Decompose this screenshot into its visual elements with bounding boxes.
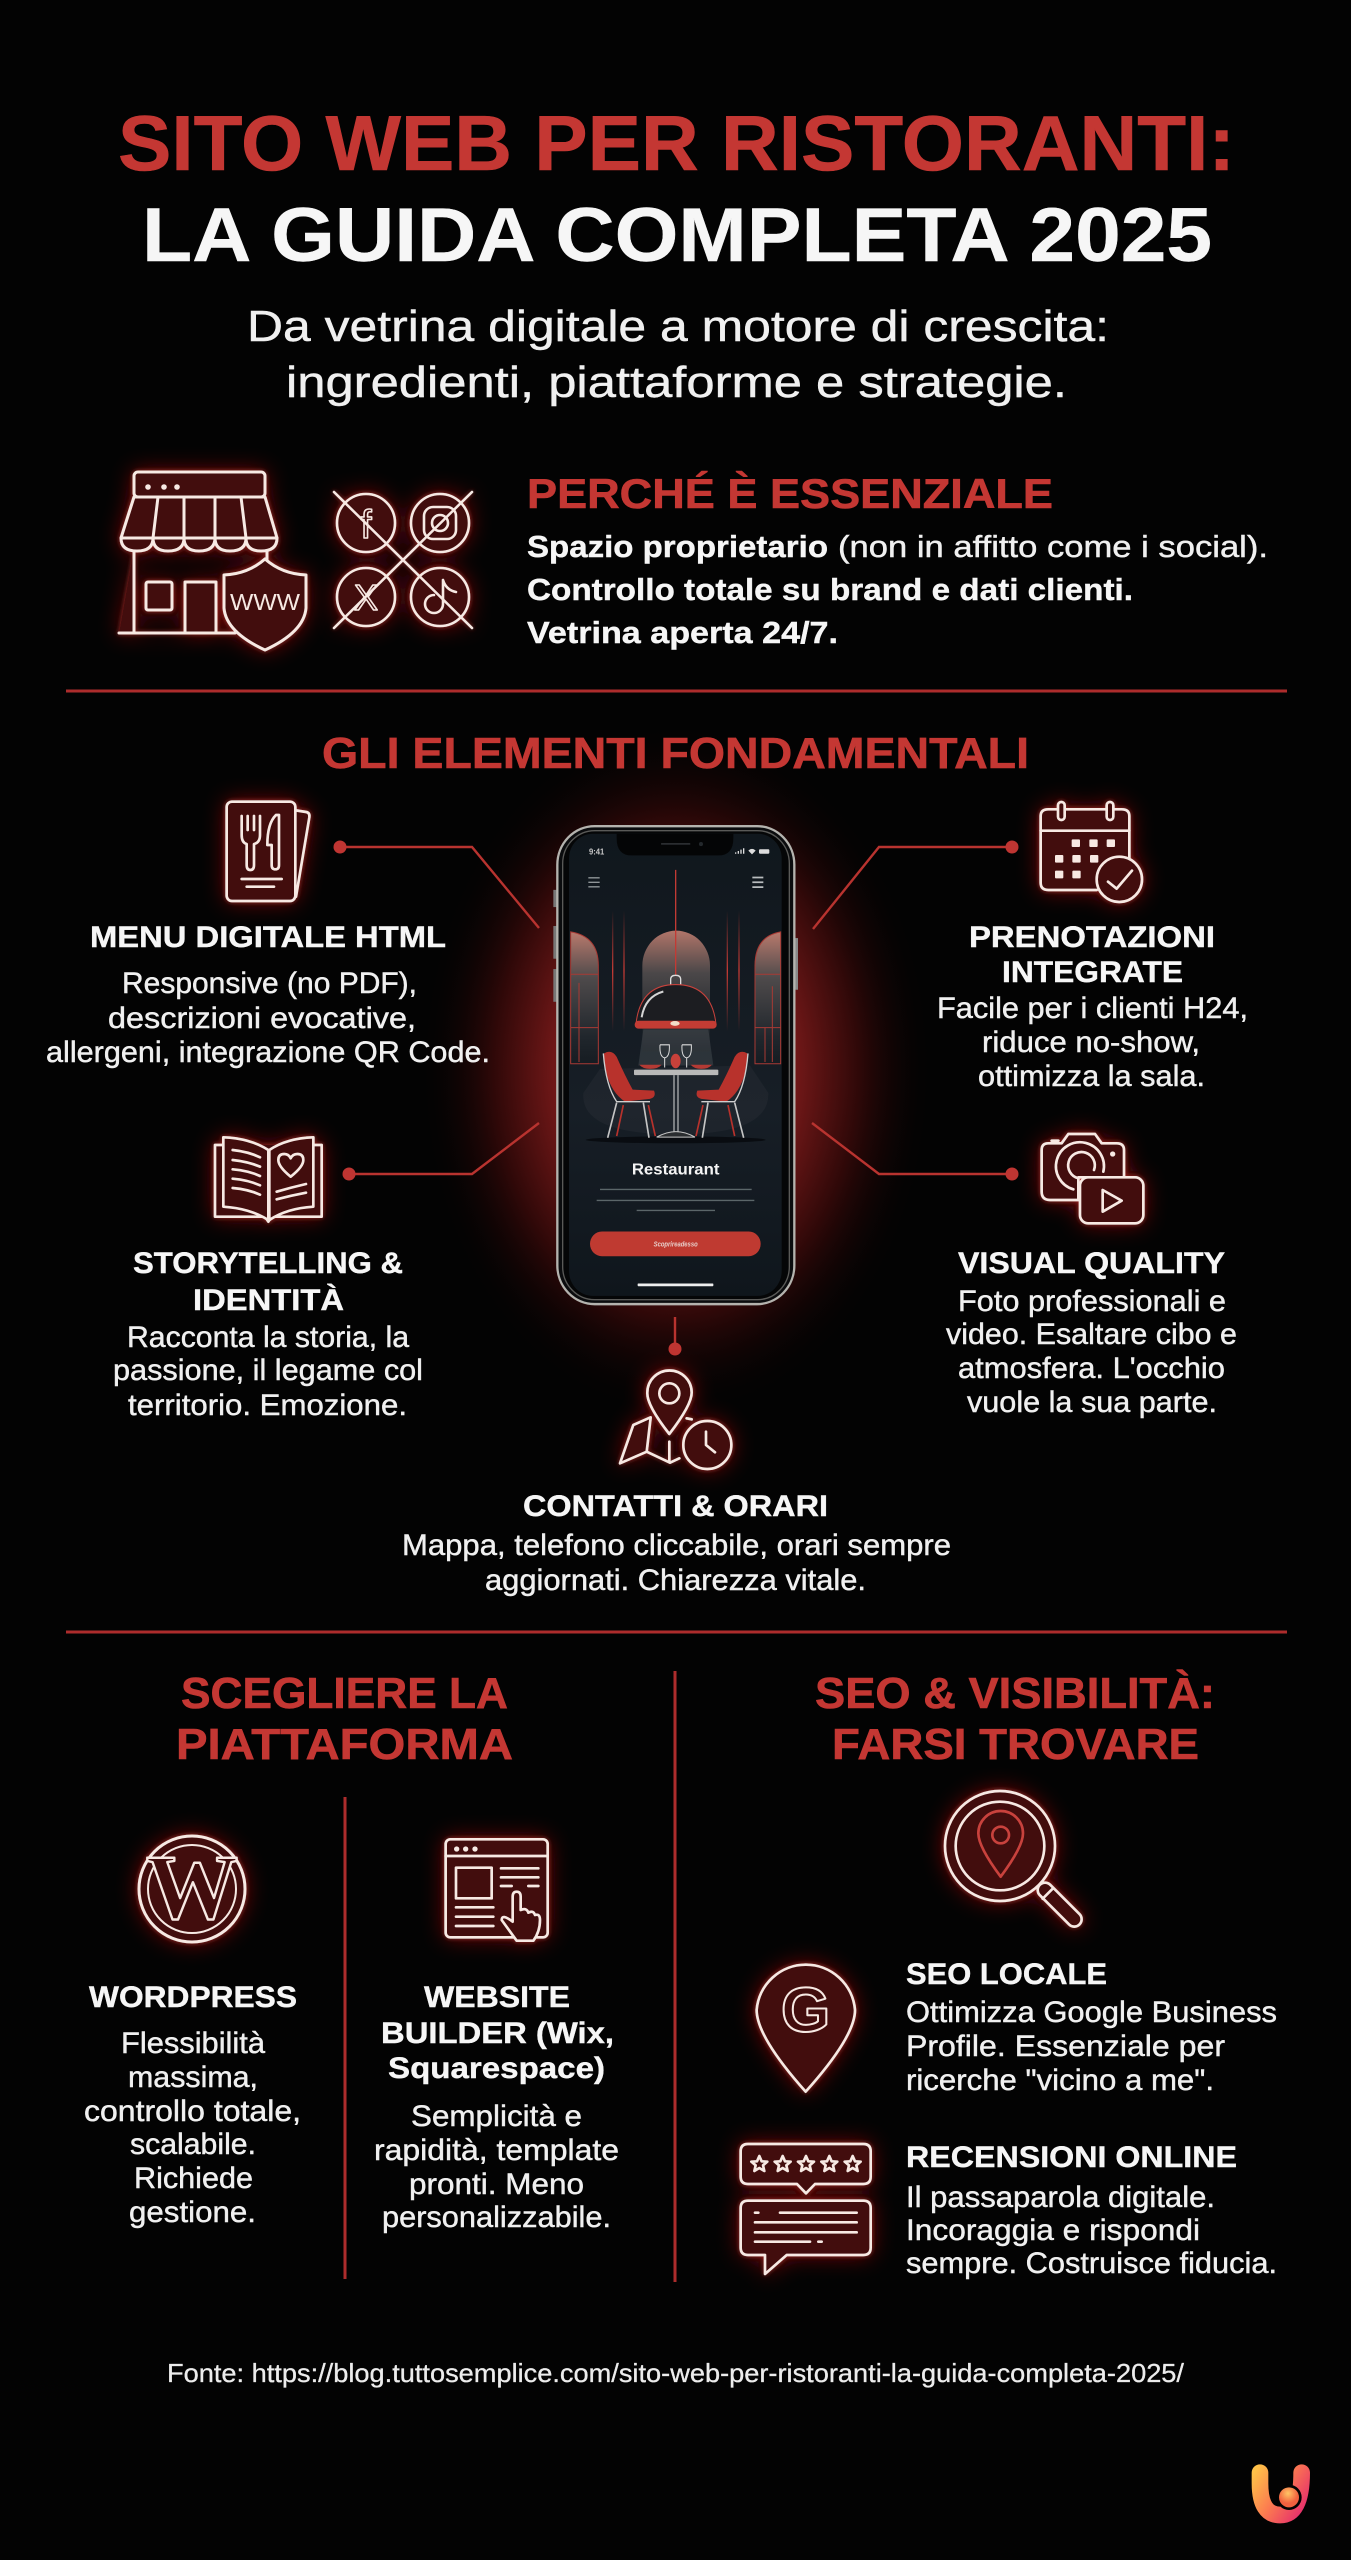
text: website builder heading: WEBSITE	[424, 1981, 570, 2014]
text: perché è essenziale: Vetrina aperta 24/7.	[527, 615, 838, 650]
icon: website builder	[446, 1839, 548, 1941]
text: prenotazioni heading: PRENOTAZIONI	[969, 921, 1215, 954]
text: storytelling description: Racconta la storia, la	[127, 1321, 409, 1354]
restaurant illustration	[571, 870, 781, 1143]
chairs	[603, 1052, 748, 1138]
icon: map pin and clock	[620, 1370, 731, 1469]
subtitle	[247, 302, 1109, 407]
text: website builder description: pronti. Meno	[409, 2168, 584, 2201]
text: visual quality description: vuole la sua parte.	[967, 1386, 1217, 1419]
text: website builder description: rapidità, template	[374, 2134, 619, 2167]
text: visual quality heading: VISUAL QUALITY	[958, 1247, 1225, 1280]
phone mockup	[553, 826, 798, 1304]
text: website builder heading: BUILDER (Wix,	[381, 2017, 614, 2050]
text: menu description	[46, 967, 490, 1069]
text: prenotazioni heading: INTEGRATE	[1002, 956, 1183, 989]
element: menu digitale	[46, 802, 490, 1069]
text: website builder heading	[381, 1981, 614, 2085]
text: visual quality description: Foto professionali e	[958, 1285, 1226, 1318]
text: wordpress description: Richiede	[134, 2162, 253, 2195]
text: wordpress description: scalabile.	[130, 2128, 256, 2161]
text: seo locale description: Ottimizza Google Business	[906, 1996, 1277, 2029]
text: seo locale description: ricerche "vicino a me".	[906, 2064, 1214, 2097]
text: visual quality description	[946, 1285, 1237, 1419]
hamburger menus	[588, 877, 763, 887]
icon: crossed-out social networks	[334, 492, 472, 628]
text: storytelling description: territorio. Emozione.	[128, 1389, 407, 1422]
source line: Fonte: https://blog.tuttosemplice.com/sito-web-per-ristoranti-la-guida-completa-2025/	[167, 2358, 1185, 2388]
text: seo locale heading: SEO LOCALE	[906, 1958, 1107, 1991]
text: prenotazioni description: ottimizza la sala.	[978, 1060, 1205, 1093]
title	[118, 99, 1235, 278]
text: recensioni description	[906, 2181, 1277, 2280]
text: contatti description: aggiornati. Chiarezza vitale.	[485, 1564, 866, 1597]
text: seo locale description: Profile. Essenziale per	[906, 2030, 1225, 2063]
text: wordpress description: controllo totale,	[84, 2095, 301, 2128]
element: prenotazioni	[937, 802, 1248, 1093]
text: storytelling heading: IDENTITÀ	[193, 1283, 344, 1317]
text: recensioni description: Il passaparola digitale.	[906, 2181, 1215, 2214]
text: seo locale description	[906, 1996, 1277, 2097]
text: wordpress heading: WORDPRESS	[89, 1981, 297, 2014]
heading: gli elementi fondamentali: GLI ELEMENTI FONDAMENTALI	[322, 729, 1029, 778]
text: contatti description	[402, 1529, 951, 1597]
text: prenotazioni description: Facile per i clienti H24,	[937, 992, 1248, 1025]
text: website builder heading: Squarespace)	[388, 2052, 605, 2085]
text: visual quality description: video. Esaltare cibo e	[946, 1318, 1237, 1351]
icon: menu card	[227, 802, 309, 901]
status bar: 9:41	[589, 847, 605, 856]
title: SITO WEB PER RISTORANTI:	[118, 99, 1235, 187]
text: perché è essenziale	[527, 529, 1268, 650]
element: contatti	[402, 1370, 951, 1597]
text: perché è essenziale: (non in affitto come i social).	[838, 529, 1268, 564]
panel: scegliere la piattaforma	[84, 1669, 619, 2234]
panel: perché è essenziale	[119, 470, 1268, 650]
icon: crossed-out social networks: X	[354, 577, 378, 618]
text: website builder description: Semplicità e	[411, 2100, 582, 2133]
text: wordpress description: massima,	[128, 2061, 258, 2094]
text: storytelling description	[113, 1321, 423, 1422]
element: visual quality	[946, 1134, 1237, 1419]
heading: seo e visibilità: FARSI TROVARE	[832, 1720, 1199, 1769]
text: storytelling heading	[133, 1247, 403, 1317]
text: recensioni description: sempre. Costruisce fiducia.	[906, 2247, 1277, 2280]
status bar	[589, 842, 769, 856]
text: contatti description: Mappa, telefono cliccabile, orari sempre	[402, 1529, 951, 1562]
text: wordpress description: Flessibilità	[121, 2027, 265, 2060]
phone glow	[421, 725, 931, 1415]
element: storytelling	[113, 1137, 423, 1422]
text: website builder description	[374, 2100, 619, 2234]
heading: seo e visibilità: SEO & VISIBILITÀ:	[815, 1668, 1215, 1718]
text: prenotazioni heading	[969, 921, 1215, 989]
text: contatti heading: CONTATTI & ORARI	[523, 1490, 828, 1523]
title: LA GUIDA COMPLETA 2025	[142, 193, 1212, 278]
connector lines	[334, 840, 1018, 1356]
text: recensioni description: Incoraggia e rispondi	[906, 2214, 1200, 2247]
phone screen title: Restaurant	[632, 1161, 719, 1179]
icon: calendar with check	[1041, 802, 1142, 902]
icon: wordpress: W	[146, 1836, 238, 1938]
phone button: Scoprireadesso	[654, 1241, 698, 1248]
text: recensioni heading: RECENSIONI ONLINE	[906, 2141, 1237, 2174]
icon: crossed-out social networks: f	[360, 503, 372, 547]
heading: perché è essenziale: PERCHÉ È ESSENZIALE	[527, 470, 1053, 517]
text: website builder description: personalizzabile.	[382, 2201, 611, 2234]
heading: seo e visibilità	[815, 1668, 1215, 1769]
icon: google pin: G	[781, 1976, 830, 2046]
icon: open book with heart	[215, 1137, 322, 1222]
text: wordpress description: gestione.	[129, 2196, 256, 2229]
text: perché è essenziale: Controllo totale su brand e dati clienti.	[527, 572, 1133, 607]
text: menu description: allergeni, integrazione QR Code.	[46, 1036, 490, 1069]
text: menu description: Responsive (no PDF),	[122, 967, 417, 1000]
subtitle: ingredienti, piattaforme e strategie.	[286, 358, 1067, 407]
icon: logo	[1260, 2473, 1302, 2515]
heading: scegliere la piattaforma: SCEGLIERE LA	[181, 1669, 508, 1718]
panel: seo e visibilità	[741, 1668, 1277, 2280]
icon: reviews	[741, 2144, 871, 2274]
text: prenotazioni description: riduce no-show,	[982, 1026, 1200, 1059]
text: wordpress description	[84, 2027, 301, 2229]
text: menu digitale html: MENU DIGITALE HTML	[90, 921, 446, 954]
icon: magnifier with pin	[945, 1791, 1085, 1930]
notch	[617, 834, 733, 855]
text: visual quality description: atmosfera. L'occhio	[958, 1352, 1225, 1385]
text: storytelling description: passione, il legame col	[113, 1354, 423, 1387]
text: storytelling heading: STORYTELLING &	[133, 1247, 403, 1280]
icon: google pin	[757, 1965, 855, 2092]
icon: shop with www shield: WWW	[230, 589, 300, 615]
text: perché è essenziale: Spazio proprietario	[527, 529, 828, 564]
subtitle: Da vetrina digitale a motore di crescita:	[247, 302, 1109, 351]
text: menu description: descrizioni evocative,	[108, 1002, 416, 1035]
heading: scegliere la piattaforma: PIATTAFORMA	[176, 1720, 513, 1769]
icon: camera and video	[1042, 1134, 1143, 1223]
icon: shop with www shield	[119, 472, 306, 650]
heading: scegliere la piattaforma	[176, 1669, 513, 1769]
text: prenotazioni description	[937, 992, 1248, 1093]
phone button	[590, 1231, 761, 1256]
